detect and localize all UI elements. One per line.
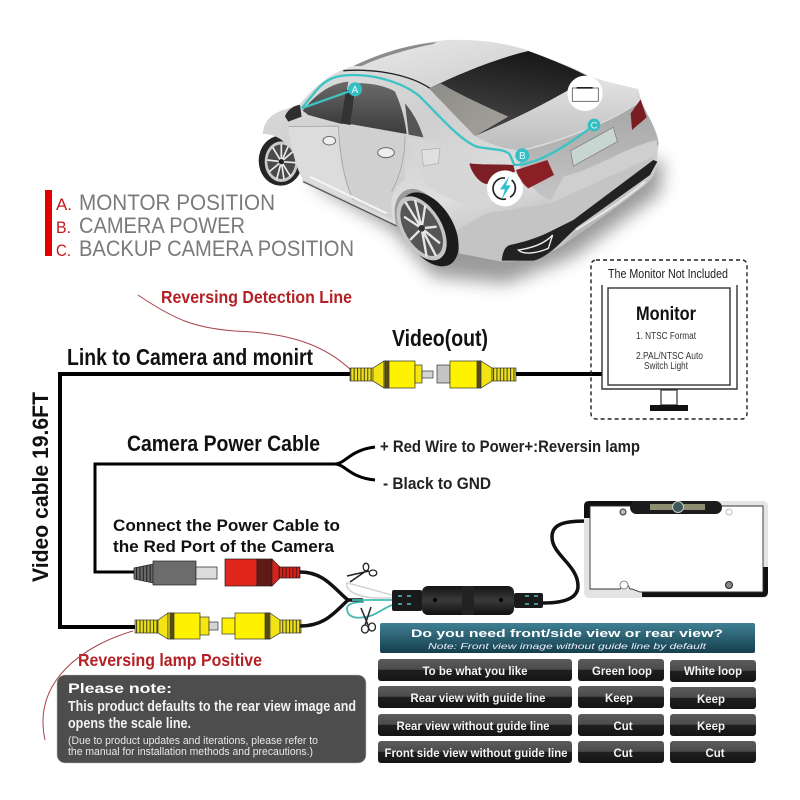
grey power plug	[134, 561, 217, 585]
note fine print: (Due to product updates and iterations, please refer to	[68, 735, 318, 747]
rear panel	[520, 102, 659, 200]
fuel door	[422, 148, 440, 166]
rear window	[429, 51, 590, 136]
side mirror	[285, 105, 302, 122]
door handle front	[323, 136, 336, 145]
black diffuser	[502, 160, 657, 261]
camera bar	[630, 501, 722, 514]
legend	[45, 190, 354, 261]
chrome strip	[576, 182, 645, 230]
table row header	[378, 659, 756, 682]
table header	[380, 623, 755, 653]
table row header: To be what you like	[422, 666, 528, 678]
note fine print: the manual for installation methods and precautions.)	[68, 746, 313, 758]
marker A: A	[352, 85, 359, 96]
roof window seal	[343, 70, 430, 88]
monitor specs: 1. NTSC Format	[636, 330, 696, 342]
reversing detection line callout: Reversing Detection Line	[161, 287, 352, 307]
white loop wire	[347, 583, 392, 598]
exhaust tip	[518, 235, 553, 253]
inset camera frame badge	[567, 76, 603, 111]
table row rear with guide line: Keep	[605, 693, 633, 705]
rear wheel	[386, 182, 471, 277]
licence plate frame camera	[584, 501, 768, 598]
lower rear bumper	[457, 157, 657, 261]
table row header: Green loop	[592, 666, 652, 678]
table row rear without guide line: Cut	[614, 721, 633, 733]
table row rear without guide line: Rear view without guide line	[396, 721, 550, 733]
legend C: BACKUP CAMERA POSITION	[79, 236, 354, 261]
vertical cable label: Video cable 19.6FT	[28, 391, 53, 582]
video plug female	[437, 361, 516, 388]
table row rear with guide line: Rear view with guide line	[410, 693, 546, 705]
table row rear with guide line: Keep	[697, 694, 725, 706]
roof	[343, 40, 528, 88]
legend A: MONTOR POSITION	[79, 190, 275, 215]
power bolt badge	[487, 170, 523, 206]
monitor panel	[591, 260, 747, 419]
video cable	[60, 374, 352, 627]
tail light left	[469, 163, 515, 184]
note fine print	[68, 735, 318, 758]
door shading	[288, 127, 352, 202]
waterproof connector	[392, 586, 543, 615]
front wheel	[259, 136, 303, 186]
car body	[263, 40, 659, 261]
monitor title: Monitor	[636, 303, 696, 325]
marker B	[515, 148, 529, 162]
power cable	[95, 447, 375, 572]
marker C: C	[591, 120, 598, 130]
quarter window	[405, 103, 423, 137]
table row front side view	[378, 741, 756, 763]
marker C	[588, 119, 600, 131]
camera cable	[543, 521, 586, 603]
car illustration	[259, 40, 663, 283]
table row front side view: Cut	[614, 748, 633, 760]
table header: Note: Front view image without guide line by default	[428, 641, 707, 651]
rear side window	[350, 83, 407, 134]
table row front side view: Cut	[706, 748, 725, 760]
connect power instruction	[113, 516, 340, 556]
monitor specs	[636, 330, 703, 372]
table row front side view: Front side view without guide line	[384, 748, 568, 760]
camera power heading: Camera Power Cable	[127, 431, 320, 456]
monitor specs: 2.PAL/NTSC Auto	[636, 350, 703, 362]
video out label: Video(out)	[392, 325, 488, 351]
tail light far side	[631, 99, 647, 130]
legend B: B.	[56, 218, 71, 237]
link label: Link to Camera and monirt	[67, 344, 313, 370]
please note panel	[57, 675, 366, 763]
reversing lamp callout: Reversing lamp Positive	[78, 650, 262, 670]
green loop wire	[347, 600, 392, 618]
legend A: A.	[56, 195, 72, 214]
sunroof rail	[353, 42, 437, 66]
video plug male	[350, 361, 433, 388]
table header: Do you need front/side view or rear view?	[411, 628, 723, 640]
licence plate	[571, 127, 617, 166]
monitor cable	[516, 372, 602, 376]
camera pigtail cables	[300, 572, 363, 626]
monitor drawing	[602, 285, 737, 411]
trunk lid	[475, 77, 640, 150]
table row rear without guide line	[378, 714, 756, 736]
marker A	[348, 82, 362, 96]
ground wire label: - Black to GND	[383, 474, 491, 493]
note body: This product defaults to the rear view image and	[68, 699, 356, 715]
yellow socket lower	[222, 613, 301, 639]
front side window	[303, 82, 348, 124]
monitor specs: Switch Light	[644, 360, 688, 372]
table row rear with guide line	[378, 686, 756, 709]
door handle rear	[378, 148, 394, 158]
tail light right	[516, 160, 554, 188]
note heading: Please note:	[68, 680, 172, 696]
yellow plug lower male	[135, 613, 218, 639]
marker B: B	[519, 151, 526, 162]
note body: opens the scale line.	[68, 716, 191, 732]
connect power instruction: Connect the Power Cable to	[113, 516, 340, 535]
monitor not included note: The Monitor Not Included	[608, 267, 728, 281]
legend red bar	[45, 190, 52, 256]
door pillar	[341, 90, 355, 125]
car ground shadow	[307, 160, 663, 283]
reversing lamp callout	[43, 631, 262, 740]
legend C: C.	[56, 241, 71, 260]
note body	[68, 699, 356, 732]
table row header: White loop	[684, 666, 742, 678]
scissors lower	[361, 607, 376, 633]
positive wire label: + Red Wire to Power+:Reversin lamp	[380, 437, 640, 456]
table row rear without guide line: Keep	[697, 721, 725, 733]
legend B: CAMERA POWER	[79, 213, 245, 238]
red power socket	[225, 559, 300, 586]
view selection table	[378, 623, 756, 763]
reversing detection line callout	[138, 287, 352, 371]
scissors upper	[347, 563, 377, 582]
connect power instruction: the Red Port of the Camera	[113, 537, 335, 556]
teal cable route	[302, 75, 594, 165]
